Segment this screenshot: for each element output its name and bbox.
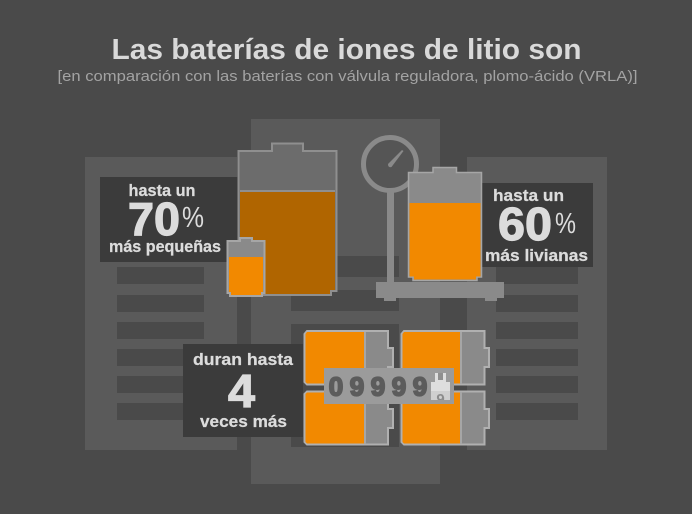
odometer counter: 0 <box>329 372 343 402</box>
odometer counter <box>324 368 454 408</box>
callout: 70% smaller: hasta un <box>128 182 196 200</box>
icon: scale <box>364 138 504 301</box>
title: Las baterías de iones de litio son <box>112 34 582 66</box>
callout: lasts 4 times longer: duran hasta <box>193 351 294 369</box>
icon: large battery <box>238 144 336 295</box>
odometer counter: 9 <box>392 372 406 402</box>
background panels <box>85 119 607 484</box>
icon: small battery <box>228 238 264 296</box>
callout: 60% lighter: más livianas <box>485 247 588 265</box>
odometer counter: 9 <box>371 372 385 402</box>
odometer counter: 9 <box>413 372 427 402</box>
callout: 60% lighter: % <box>555 208 576 240</box>
icon: battery bottom left <box>304 392 393 444</box>
callout: 70% smaller: % <box>182 202 204 234</box>
callout: lasts 4 times longer <box>183 344 303 437</box>
callout: 70% smaller: 70 <box>128 193 180 245</box>
callout: 70% smaller: más pequeñas <box>109 238 221 256</box>
callout: 70% smaller <box>100 177 238 262</box>
callout: 60% lighter: 60 <box>498 198 552 250</box>
odometer counter: 9 <box>436 391 445 408</box>
icon: battery bottom right <box>402 392 489 444</box>
icon: battery on scale <box>408 168 482 280</box>
icon: battery top left <box>304 331 393 384</box>
icon: battery top right <box>402 331 489 384</box>
odometer counter: 9 <box>350 372 364 402</box>
callout: 60% lighter <box>482 183 593 267</box>
callout: lasts 4 times longer: 4 <box>228 365 255 417</box>
subtitle: [en comparación con las baterías con válvula reguladora, plomo-ácido (VRLA)] <box>58 68 638 85</box>
callout: lasts 4 times longer: veces más <box>200 413 287 431</box>
callout: 60% lighter: hasta un <box>493 187 564 205</box>
